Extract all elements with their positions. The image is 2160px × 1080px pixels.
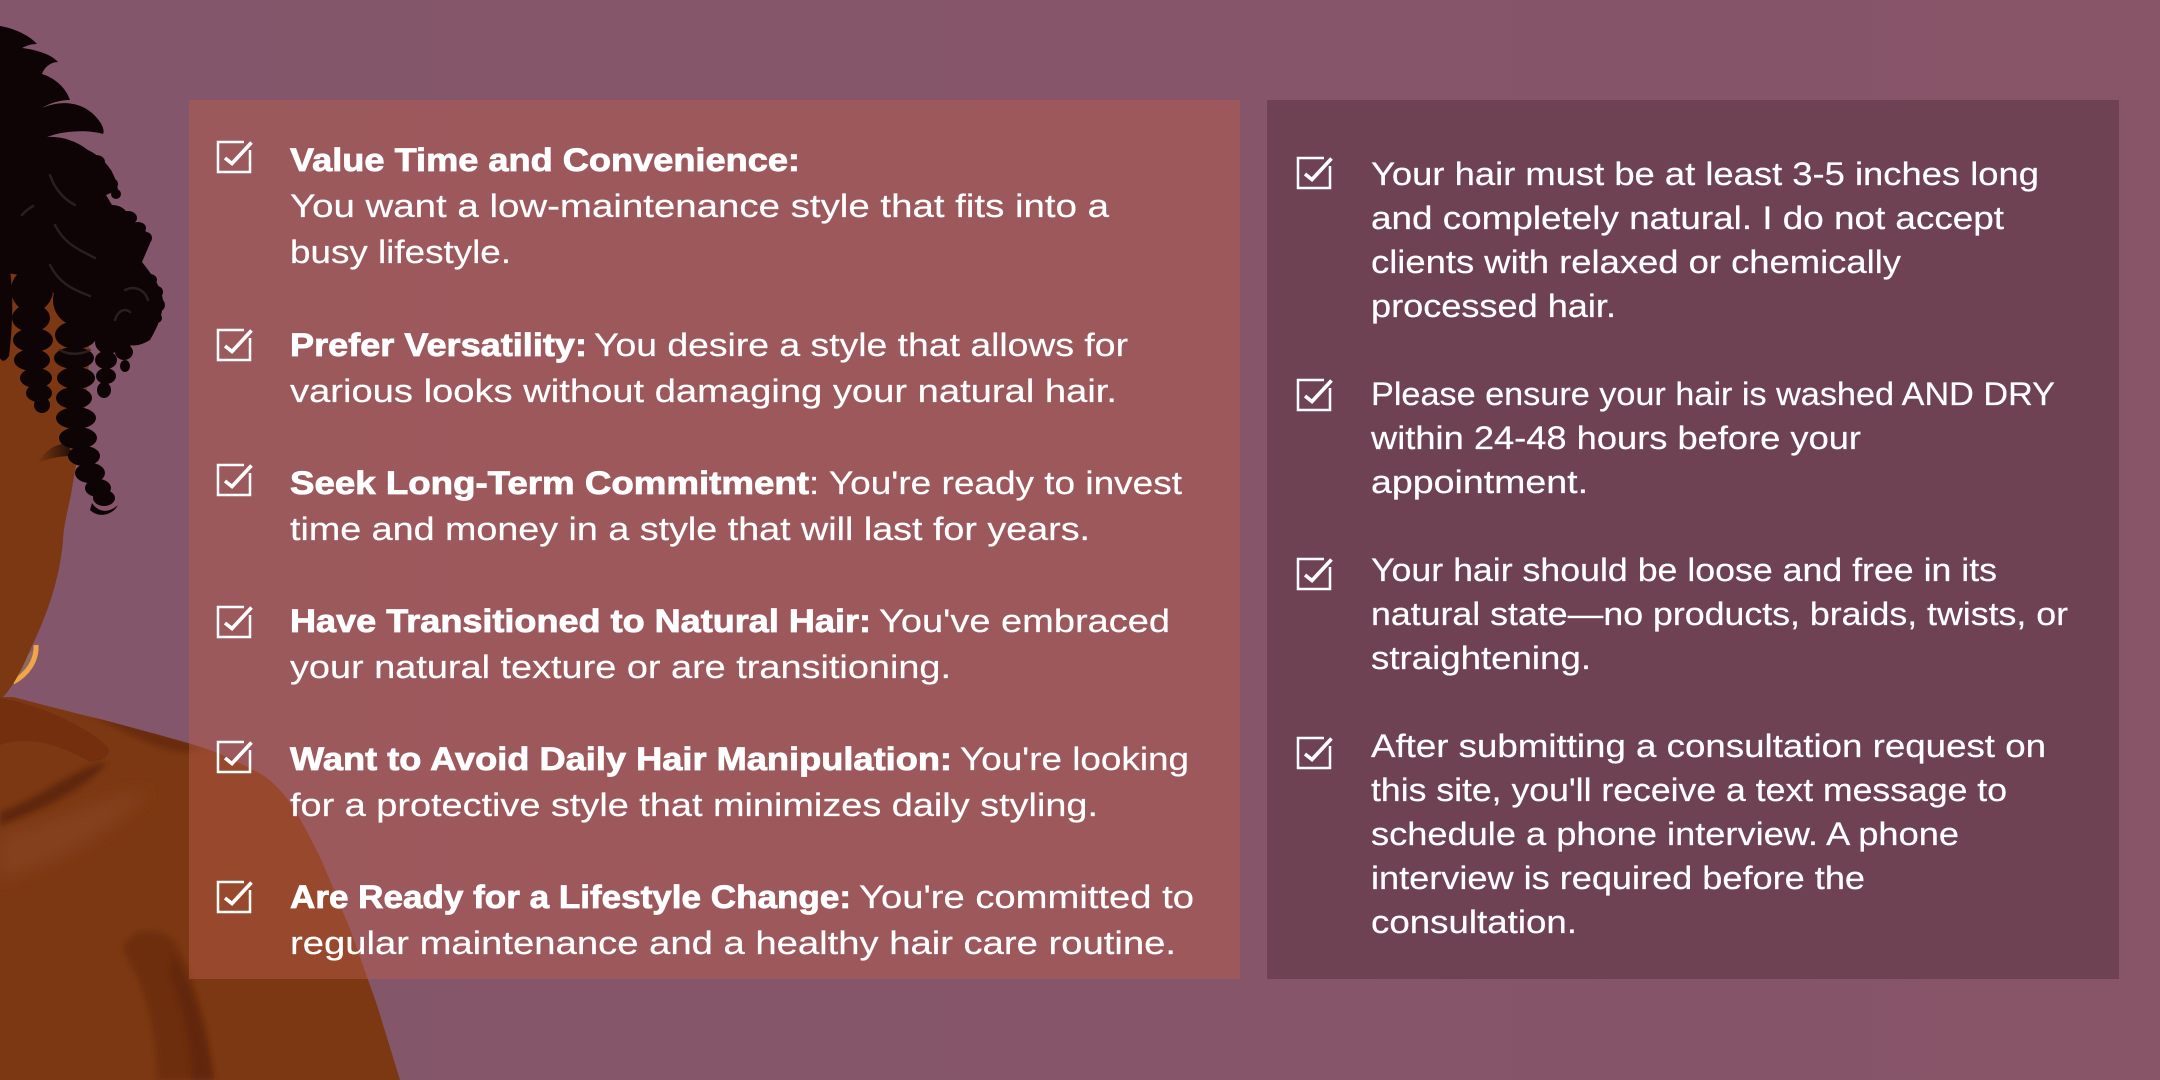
earring [13,645,36,682]
item: value time: You want a low-maintenance style that fits into a [290,188,1109,224]
item: value time: Value Time and Convenience: [290,142,800,178]
item: washed and dry: within 24-48 hours before your [1370,420,1861,456]
item: loose and free: Your hair should be loose and free in its [1371,552,1997,588]
lock: left inner [11,268,53,413]
item: lifestyle change: You're committed to [859,879,1194,915]
item: consultation request: schedule a phone interview. A phone [1371,816,1959,852]
item: avoid manipulation: Want to Avoid Daily Hair Manipulation: [290,741,952,777]
item: consultation request: this site, you'll receive a text message to [1371,772,2007,808]
skin: face, neck and shoulder [0,270,400,1080]
lock: small curl [113,323,137,372]
hair silhouette [0,26,163,345]
item: lifestyle change [218,879,1194,961]
item: consultation request: consultation. [1371,904,1577,940]
far left lock [0,270,12,361]
item: versatility: Prefer Versatility: [290,327,587,363]
item: hair length: clients with relaxed or chemically [1371,244,1901,280]
item: transitioned: your natural texture or are transitioning. [290,649,951,685]
item: long-term commitment: time and money in a style that will last for years. [290,511,1090,547]
shoulder shading [0,698,213,1080]
panel background [189,100,1240,979]
outer curl bumps [87,155,165,323]
panel: who this is for [189,100,1240,979]
item: avoid manipulation: You're looking [960,741,1189,777]
item: hair length: processed hair. [1371,288,1616,324]
item: lifestyle change: Are Ready for a Lifestyle Change: [290,879,851,915]
item: washed and dry: Please ensure your hair is washed AND DRY [1371,376,2055,412]
item: loose and free [1298,552,2068,676]
item: transitioned: You've embraced [879,603,1170,639]
item: hair length [1298,156,2039,324]
shoulder highlight [8,807,118,868]
lock: main long curl [53,274,118,515]
collarbone shadow [0,762,107,826]
item: long-term commitment: Seek Long-Term Commitment [290,465,809,501]
item: long-term commitment: : You're ready to invest [809,465,1182,501]
hair highlights [22,175,148,354]
item: lifestyle change: regular maintenance and a healthy hair care routine. [290,925,1176,961]
neck shadow [0,698,109,762]
item: washed and dry: appointment. [1371,464,1588,500]
item: hair length: and completely natural. I do not accept [1371,200,2004,236]
item: transitioned: Have Transitioned to Natural Hair: [290,603,871,639]
item: versatility: various looks without damaging your natural hair. [290,373,1117,409]
item: loose and free: straightening. [1371,640,1591,676]
hair mass [0,26,165,515]
illustration: woman with curly hair [0,26,400,1080]
item: consultation request: After submitting a consultation request on [1371,728,2046,764]
item: value time: busy lifestyle. [290,234,511,270]
item: hair length: Your hair must be at least 3-5 inches long [1371,156,2039,192]
top shoulder shadow [98,718,199,752]
item: value time [218,142,1109,270]
item: long-term commitment [218,465,1182,547]
upper arm shadow [124,931,199,1080]
item: avoid manipulation: for a protective style that minimizes daily styling. [290,787,1098,823]
item: loose and free: natural state—no products, braids, twists, or [1371,596,2068,632]
item: transitioned [218,603,1170,685]
item: consultation request [1298,728,2046,940]
item: washed and dry [1298,376,2055,500]
hair shadow on cheek [37,443,72,464]
panel: requirements [1267,100,2119,979]
lock: short curl [95,330,121,398]
item: consultation request: interview is required before the [1371,860,1865,896]
item: avoid manipulation [218,741,1189,823]
item: versatility: You desire a style that allows for [594,327,1128,363]
panel background [1267,100,2119,979]
item: versatility [218,327,1128,409]
